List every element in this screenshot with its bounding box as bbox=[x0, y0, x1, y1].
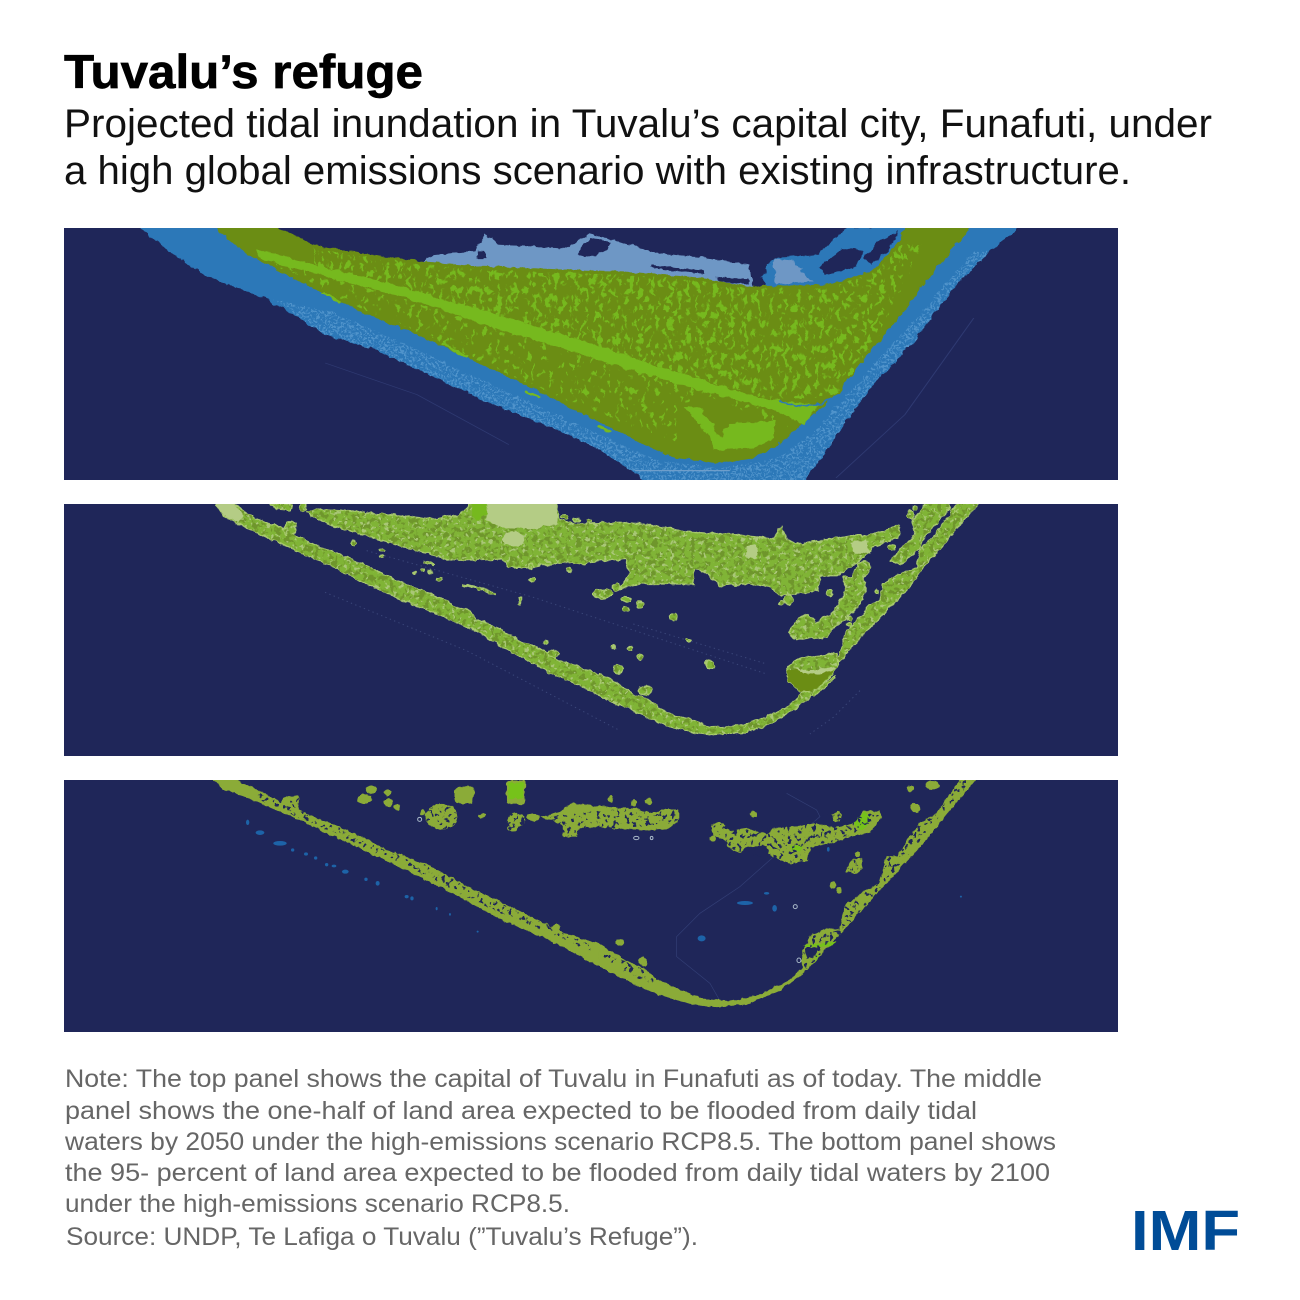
tide line bbox=[635, 470, 730, 471]
runway bbox=[253, 248, 819, 425]
note text: panel shows the one-half of land area expected to be flooded from daily tidal bbox=[65, 1097, 977, 1125]
land dapple south bbox=[262, 258, 790, 441]
shore flecks bbox=[321, 291, 612, 433]
bright green patches bbox=[508, 783, 870, 963]
bright patch bbox=[472, 502, 487, 521]
subtitle bbox=[64, 102, 1212, 193]
panel: 2050 map bbox=[64, 502, 1118, 756]
dark green wedge bbox=[787, 669, 833, 692]
pale wedge band bbox=[793, 667, 837, 675]
faint reef trace bbox=[325, 551, 860, 734]
dark flecks bbox=[253, 780, 973, 983]
subtitle: a high global emissions scenario with existing infrastructure. bbox=[64, 149, 1131, 193]
lagoon blue patch bbox=[761, 226, 911, 288]
land features bbox=[215, 502, 979, 735]
note text: the 95- percent of land area expected to be flooded from daily tidal waters by 2100 bbox=[65, 1159, 1050, 1187]
note text: under the high-emissions scenario RCP8.5. bbox=[65, 1190, 570, 1218]
lagoon dark patches bbox=[819, 231, 899, 275]
note text: Note: The top panel shows the capital of Tuvalu in Funafuti as of today. The middle bbox=[65, 1065, 1042, 1093]
note text: waters by 2050 under the high-emissions scenario RCP8.5. The bottom panel shows bbox=[64, 1128, 1056, 1156]
roughened features bbox=[139, 226, 1020, 485]
ring islets bbox=[418, 817, 801, 963]
creek bbox=[779, 398, 833, 406]
map features bbox=[215, 502, 979, 735]
faint traces bbox=[325, 318, 974, 478]
panel: today map bbox=[64, 226, 1118, 485]
faint reef trace bbox=[677, 793, 820, 1007]
shallows dark patches bbox=[477, 238, 747, 284]
lagoon pale patch bbox=[773, 258, 810, 285]
land base bbox=[215, 226, 971, 463]
land mottling pale bbox=[215, 502, 979, 735]
lagoon shallows bbox=[423, 233, 753, 287]
wedge hole bbox=[804, 947, 820, 958]
land base bbox=[215, 502, 979, 735]
reef water speckle bbox=[274, 251, 991, 485]
IMF logo: IMF bbox=[1131, 1199, 1240, 1263]
land mottling dark bbox=[215, 502, 979, 735]
title: Tuvalu’s refuge bbox=[64, 45, 423, 98]
blue pools bbox=[246, 820, 962, 941]
land dapple north bbox=[314, 245, 922, 401]
note text bbox=[64, 1065, 1056, 1218]
map features bbox=[139, 226, 1020, 485]
runway end patch bbox=[684, 406, 776, 450]
source text: Source: UNDP, Te Lafiga o Tuvalu (”Tuvalu’s Refuge”). bbox=[66, 1223, 698, 1251]
reef water band bbox=[139, 226, 1020, 485]
land features bbox=[213, 778, 976, 1007]
map features bbox=[213, 778, 976, 1007]
land base bbox=[213, 778, 976, 1007]
pale patches bbox=[215, 502, 870, 559]
lagoon water bbox=[278, 228, 872, 287]
subtitle: Projected tidal inundation in Tuvalu’s capital city, Funafuti, under bbox=[64, 102, 1212, 146]
panel: 2100 map bbox=[64, 778, 1118, 1032]
